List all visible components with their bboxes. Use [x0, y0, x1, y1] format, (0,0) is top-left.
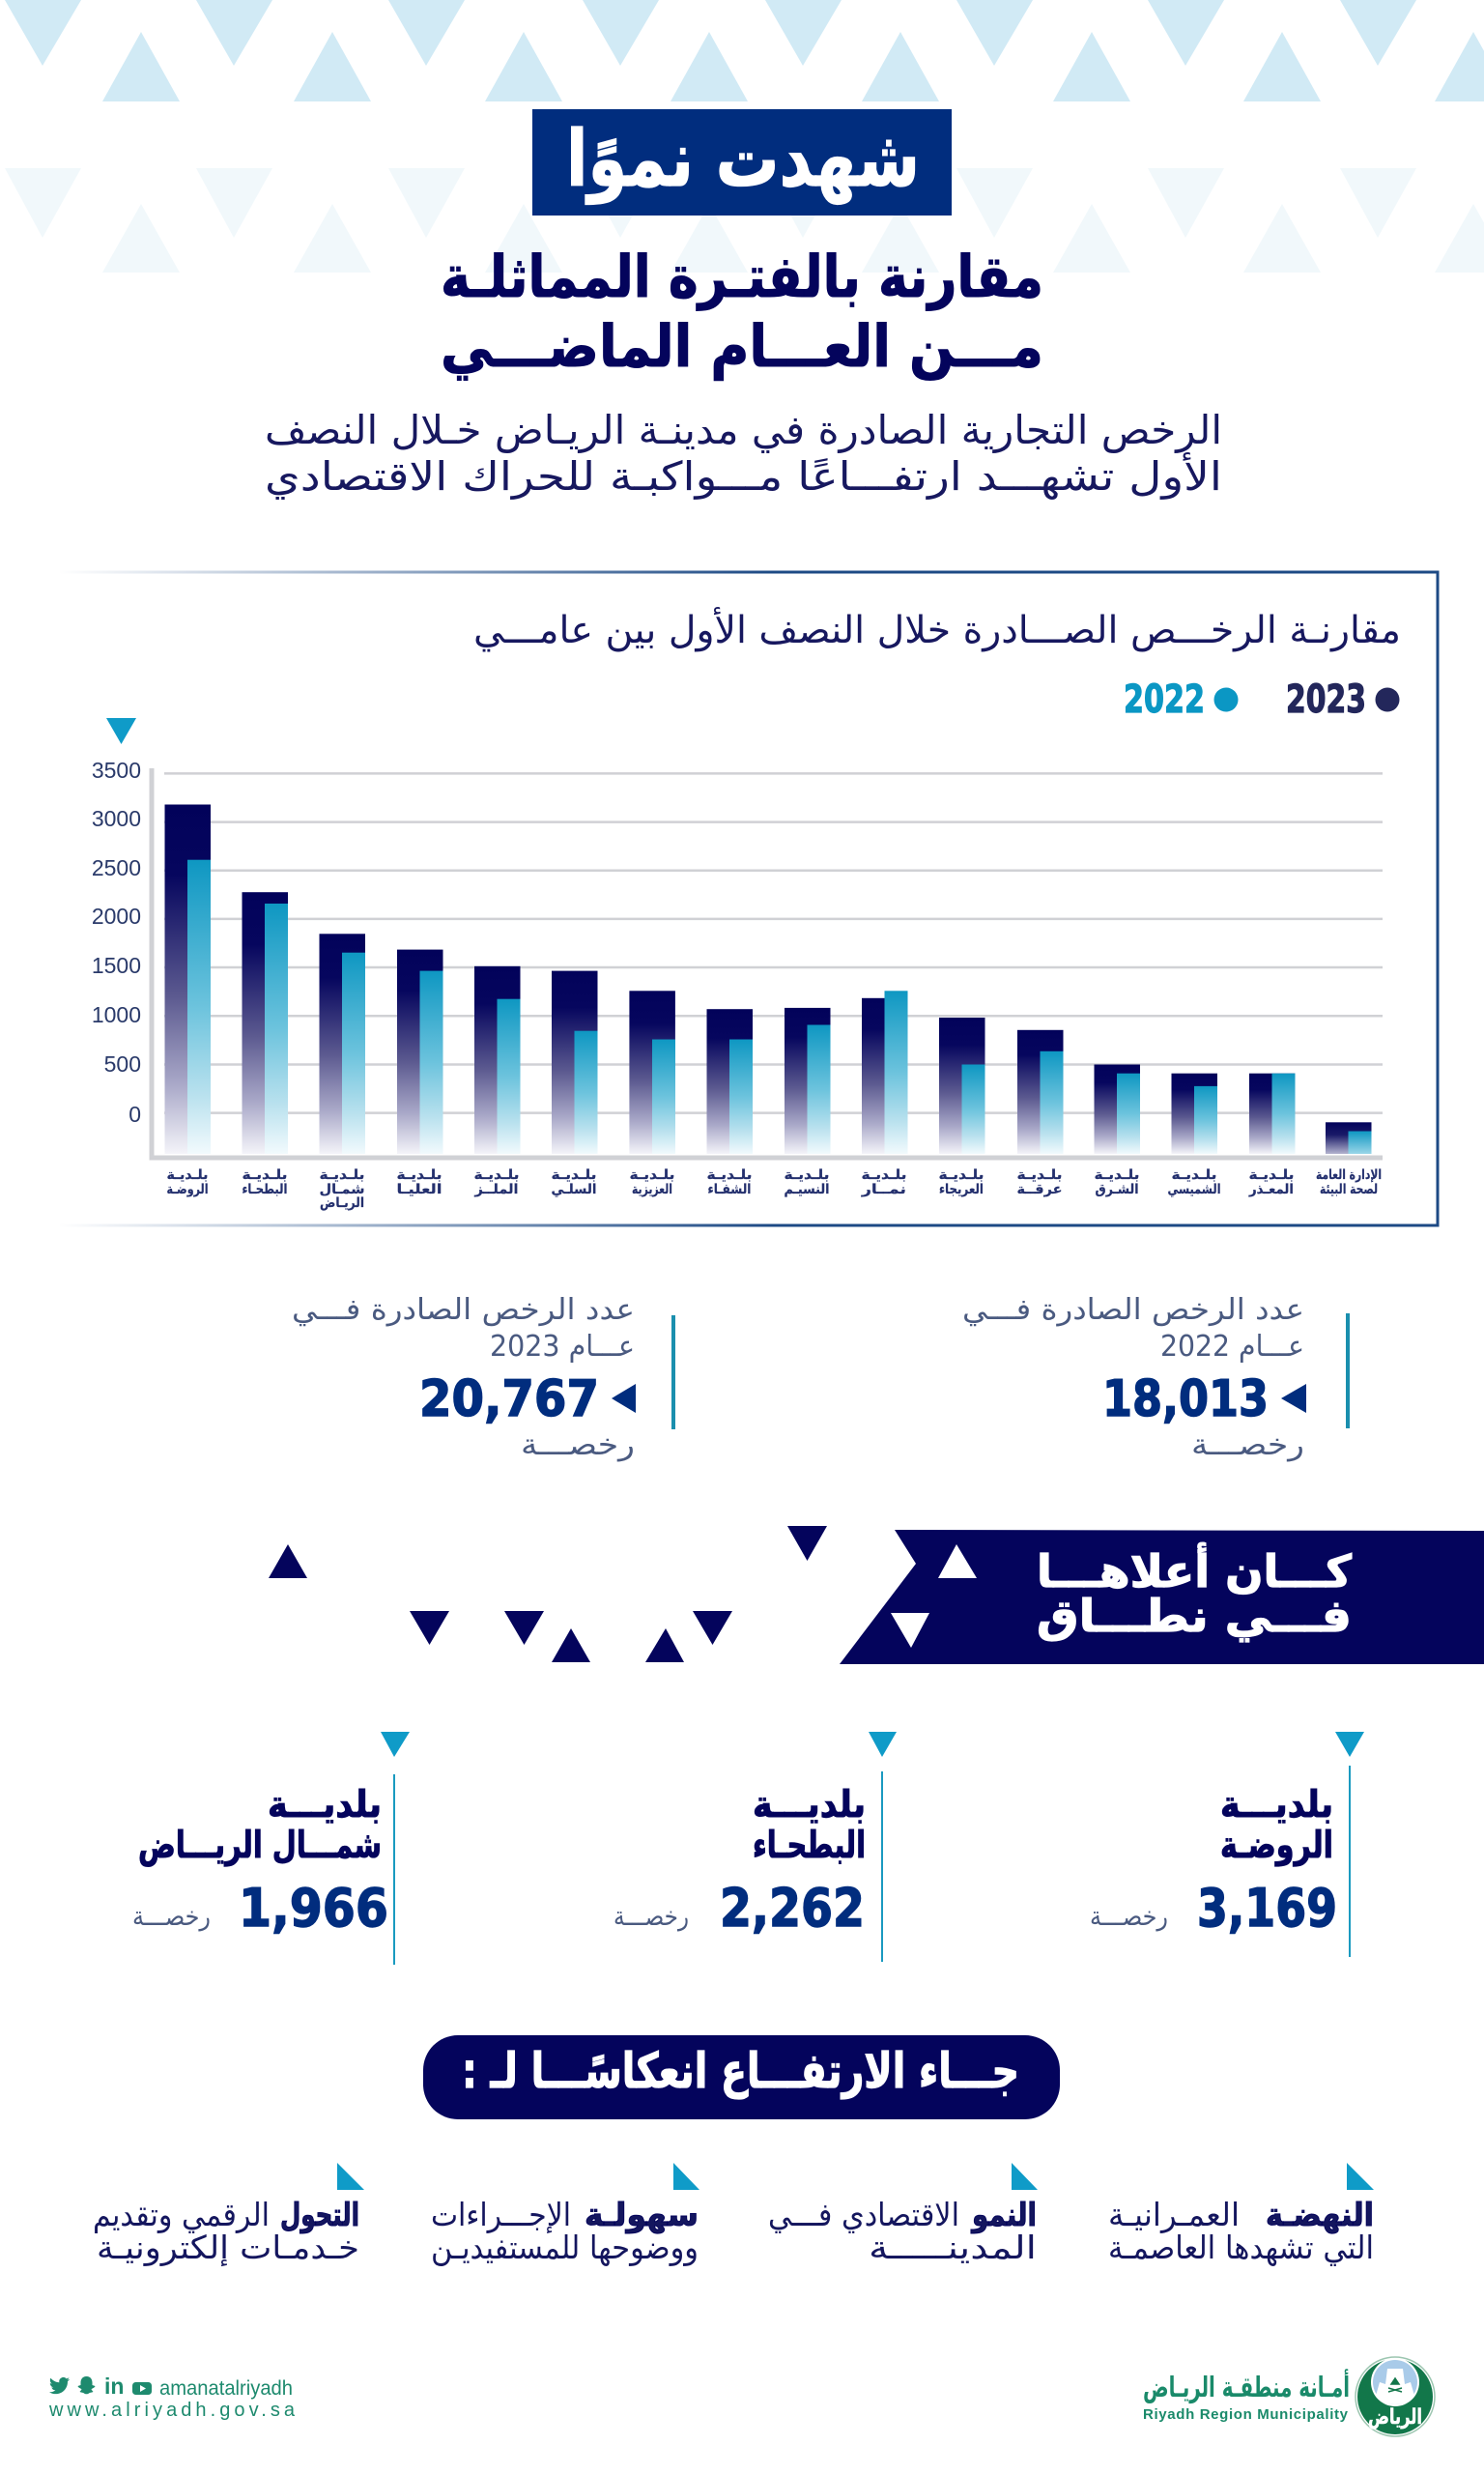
- x axis labels: الملــز: [473, 1182, 518, 1197]
- stat: Al Batha: 2,262: [720, 1878, 865, 1939]
- reason: ease of procedures: سهولـة: [585, 2196, 699, 2234]
- reason: digital transformation: التحول: [280, 2196, 359, 2234]
- reason: economic growth: النمو: [970, 2196, 1037, 2234]
- reason: digital transformation: الرقمي وتقديم: [93, 2196, 270, 2233]
- stat: Al Batha: البطحـاء: [753, 1824, 866, 1866]
- reason: economic growth: الاقتصادي فـــي: [768, 2196, 959, 2233]
- reason: urban renaissance: [1108, 2163, 1374, 2266]
- stat: Al Rawdah: [1090, 1732, 1364, 1957]
- website: www.alriyadh.gov.sa: [48, 2400, 296, 2421]
- x axis labels: العريجاء: [939, 1182, 984, 1197]
- stat: North Riyadh: شمـــال الريـــاض: [138, 1824, 382, 1866]
- stat: 2023 licences: عـــام 2023: [490, 1330, 635, 1364]
- x axis labels: بلـديـة: [1094, 1167, 1140, 1183]
- stat: Al Batha: بلديـــة: [753, 1783, 866, 1826]
- stat: 2022 licences: 18,013: [1102, 1370, 1269, 1428]
- banner: highest in range: [840, 1530, 1484, 1664]
- y axis labels: 3500: [92, 758, 141, 783]
- x axis labels: [166, 1167, 1382, 1211]
- x axis labels: الشفـاء: [707, 1182, 752, 1197]
- x axis labels: لصحة البيئة: [1320, 1182, 1378, 1197]
- x axis labels: شمـال: [319, 1182, 365, 1197]
- reason: urban renaissance: العمـرانيـة: [1108, 2196, 1240, 2233]
- x axis labels: بلـديـة: [551, 1167, 597, 1183]
- footer: municipality name: [1143, 2369, 1350, 2423]
- banner: highest in range: كـــان أعلاهـــا: [1037, 1542, 1352, 1597]
- x axis labels: المعـذر: [1248, 1182, 1294, 1197]
- stat: 2022 licences: عدد الرخص الصادرة فـــي: [962, 1293, 1304, 1327]
- stat: 2022 licences: [962, 1293, 1350, 1462]
- y axis labels: [92, 758, 141, 1127]
- stat: Al Rawdah: 3,169: [1197, 1878, 1337, 1939]
- footer: social and website: [48, 2373, 296, 2421]
- title box: شهدت نموًا: [566, 114, 920, 205]
- x axis labels: الشـرق: [1096, 1182, 1138, 1197]
- footer: municipality name: Riyadh Region Municipality: [1143, 2406, 1349, 2423]
- footer: municipality name: أمـانة منطقـة الريـاض: [1143, 2369, 1350, 2403]
- y axis labels: 0: [128, 1102, 141, 1127]
- stat: 2023 licences: رخصـــة: [521, 1428, 635, 1462]
- banner: highest in range: فـــي نطـــاق: [1037, 1590, 1352, 1642]
- background triangles: top row: [5, 0, 1484, 101]
- x axis labels: بلـديـة: [473, 1167, 520, 1183]
- stat: North Riyadh: بلديـــة: [268, 1783, 382, 1826]
- x axis labels: بلـديـة: [785, 1167, 829, 1183]
- y axis labels: 500: [104, 1051, 141, 1077]
- stat: North Riyadh: [132, 1732, 410, 1965]
- icon: snapchat: [77, 2376, 95, 2394]
- heading: مقارنة بالفتـرة المماثلـة: [441, 244, 1043, 311]
- reason: digital transformation: [93, 2163, 364, 2267]
- stat: North Riyadh: رخصـــة: [132, 1902, 211, 1932]
- x axis labels: الشميسي: [1167, 1182, 1221, 1197]
- stat: 2023 licences: عدد الرخص الصادرة فـــي: [292, 1293, 635, 1327]
- intro text: الرخص التجارية الصادرة في مدينـة الريـاض خـلال النصف: [265, 407, 1222, 454]
- heading: [441, 244, 1043, 381]
- legend: 2022: [1124, 677, 1205, 722]
- icon: axis marker triangle: [106, 718, 136, 744]
- x axis labels: بلـديـة: [1016, 1167, 1063, 1183]
- icon: municipality logo: الرياض: [1368, 2405, 1422, 2430]
- chart title: مقارنـة الرخـــص الصـــادرة خلال النصف الأول بين عامـــي: [473, 606, 1401, 652]
- x axis labels: عرقــة: [1016, 1182, 1063, 1197]
- stat: 2022 licences: عـــام 2022: [1160, 1330, 1304, 1364]
- icon: twitter: [49, 2377, 70, 2394]
- x axis labels: الريـاض: [320, 1195, 364, 1211]
- heading: مـــن العـــام الماضـــي: [441, 313, 1043, 381]
- reason: ease of procedures: [431, 2163, 699, 2266]
- stat: Al Rawdah: بلديـــة: [1220, 1783, 1333, 1826]
- intro text: [265, 407, 1222, 500]
- reason: ease of procedures: الإجـــراءات: [431, 2196, 571, 2233]
- reason: urban renaissance: النهضـة: [1266, 2196, 1374, 2234]
- reason: ease of procedures: ووضوحها للمستفيديـن: [431, 2229, 699, 2266]
- reason: urban renaissance: التي تشهدها العاصمـة: [1108, 2229, 1374, 2266]
- legend: [1124, 677, 1399, 722]
- x axis labels: العزيزية: [632, 1182, 672, 1197]
- x axis labels: بلـديـة: [1248, 1167, 1295, 1183]
- reason: digital transformation: خـدمـات إلكترونيـة: [97, 2229, 359, 2267]
- y axis labels: 3000: [92, 806, 141, 831]
- stat: 2023 licences: [292, 1293, 675, 1462]
- background triangles: faded row: [5, 168, 1484, 273]
- reason: economic growth: [768, 2163, 1038, 2266]
- icon: youtube: [132, 2382, 152, 2395]
- x axis labels: بلـديـة: [939, 1167, 984, 1183]
- stat: 2023 licences: 20,767: [419, 1370, 599, 1428]
- stat: Al Rawdah: رخصـــة: [1090, 1902, 1168, 1932]
- stat: North Riyadh: 1,966: [239, 1878, 388, 1939]
- intro text: الأول تشهـــد ارتفـــاعًا مـــواكبـة للحراك الاقتصادي: [265, 451, 1222, 500]
- x axis labels: بلـديـة: [862, 1167, 906, 1183]
- y axis labels: 1000: [92, 1002, 141, 1027]
- x axis labels: الإدارة العامة: [1316, 1167, 1382, 1183]
- x axis labels: العليـا: [396, 1182, 442, 1197]
- x axis labels: بلـديـة: [242, 1167, 288, 1183]
- y axis labels: 2000: [92, 904, 141, 929]
- icon: linkedin: in: [104, 2373, 124, 2399]
- pill heading: جـــاء الارتفـــاع انعكاسًـــا لـ :: [462, 2043, 1019, 2099]
- x axis labels: البطحـاء: [242, 1182, 288, 1197]
- social handle: amanatalriyadh: [159, 2377, 293, 2400]
- x axis labels: بلـديـة: [630, 1167, 674, 1183]
- legend: 2023: [1286, 677, 1366, 722]
- stat: Al Rawdah: الروضـة: [1220, 1824, 1333, 1867]
- x axis labels: بلـديـة: [396, 1167, 442, 1183]
- x axis labels: بلـديـة: [319, 1167, 365, 1183]
- bar chart: [164, 804, 1372, 1154]
- decorative navy triangles: [269, 1526, 827, 1662]
- pill heading: [423, 2035, 1060, 2119]
- x axis labels: الروضـة: [166, 1182, 209, 1197]
- x axis labels: النسيـم: [785, 1182, 829, 1197]
- stat: Al Batha: رخصـــة: [614, 1902, 689, 1932]
- y axis labels: 1500: [92, 953, 141, 978]
- x axis labels: بلـديـة: [1171, 1167, 1217, 1183]
- panel: chart: [58, 572, 1438, 1225]
- x axis labels: بلـديـة: [166, 1167, 209, 1183]
- reason: economic growth: المدينـــــة: [869, 2229, 1037, 2266]
- x axis labels: بلـديـة: [707, 1167, 752, 1183]
- stat: Al Batha: [614, 1732, 897, 1962]
- stat: 2022 licences: رخصـــة: [1191, 1428, 1304, 1462]
- y axis labels: 2500: [92, 855, 141, 880]
- x axis labels: نمــار: [861, 1182, 906, 1197]
- x axis labels: السلـي: [551, 1182, 597, 1197]
- icon: municipality logo: [1356, 2357, 1435, 2436]
